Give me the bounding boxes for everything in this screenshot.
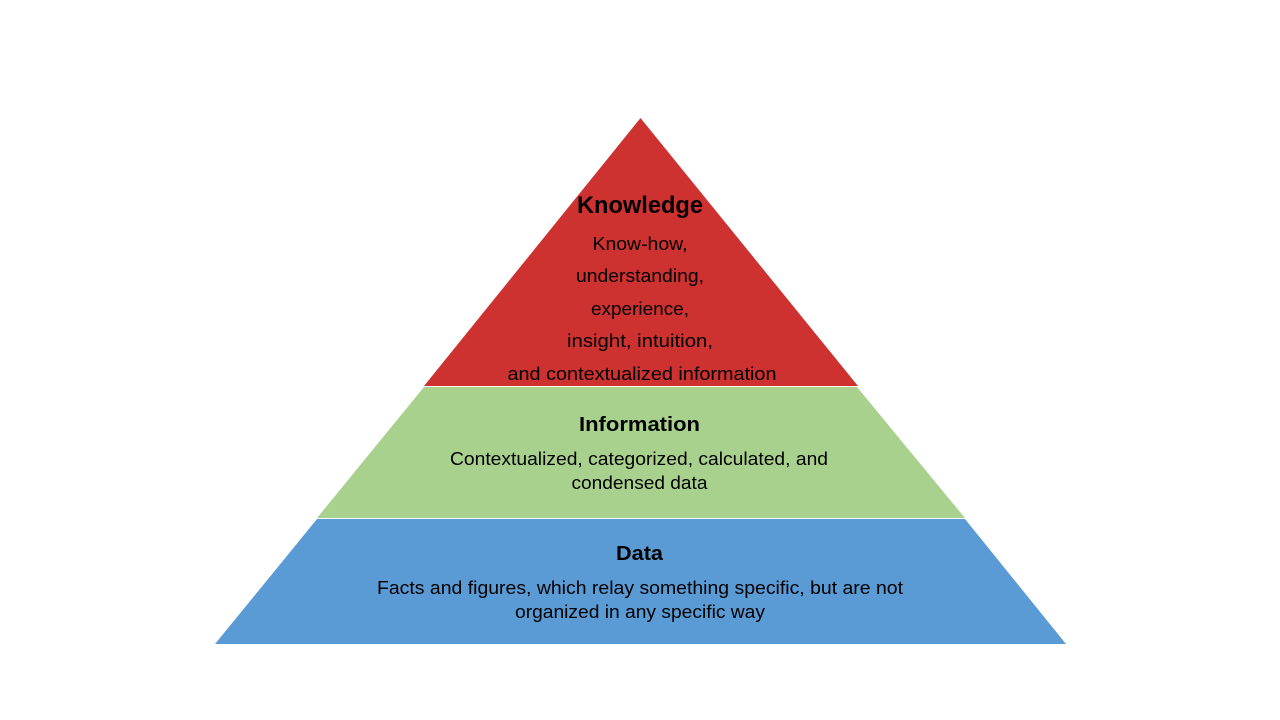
text block: knowledge description: Know-how, [592,233,688,254]
text block: information description: Contextualized, categorized, calculated, and [450,448,828,469]
text block: knowledge description: insight, intuition, [567,330,713,351]
text block: data description: Facts and figures, which relay something specific, but are not [377,577,903,598]
heading: data: Data [616,542,664,565]
text block: knowledge description: understanding, [576,265,704,286]
text block: knowledge description: and contextualized information [508,363,776,384]
heading: information: Information [579,413,700,436]
text block: data description: organized in any specific way [515,601,766,622]
text block: data description [377,577,903,622]
text block: information description: condensed data [572,472,708,493]
tier: data [215,519,1066,644]
tier: information [317,387,965,518]
text block: knowledge description: experience, [591,298,689,319]
heading: knowledge: Knowledge [577,192,703,219]
text block: information description [450,448,828,493]
text block: knowledge description [508,233,776,384]
tier: knowledge [424,118,858,386]
